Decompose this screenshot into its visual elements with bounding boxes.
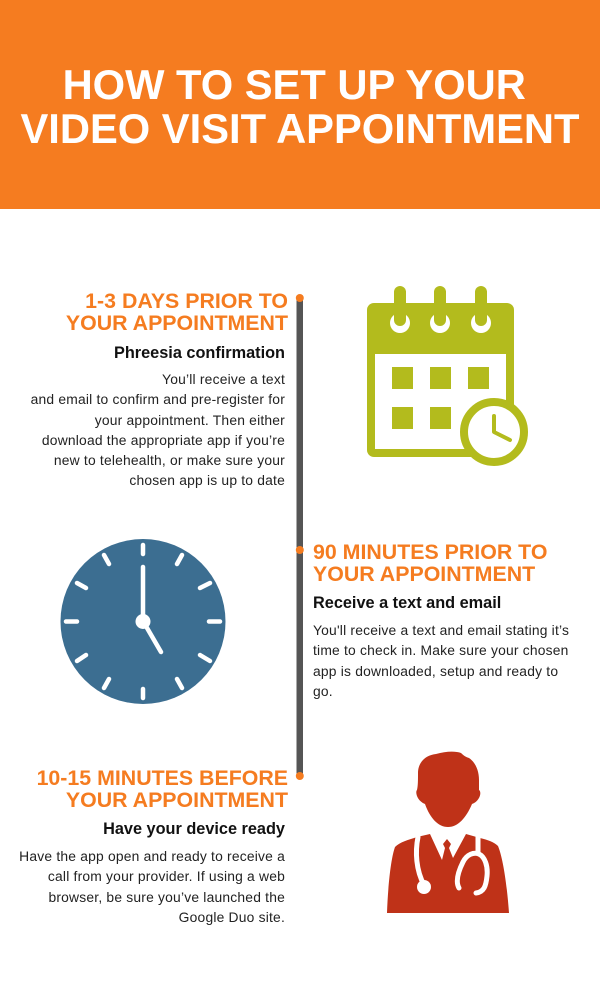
step 2 body: You'll receive a text and email stating it’s — [313, 622, 569, 638]
step 2 body: time to check in. Make sure your chosen — [313, 642, 569, 658]
step 3 heading — [37, 766, 288, 812]
step 3 subheading: Have your device ready — [103, 820, 285, 838]
step 2 body: go. — [313, 683, 333, 699]
step 2 body: app is downloaded, setup and ready to — [313, 663, 558, 679]
step 3 body: Have the app open and ready to receive a — [19, 848, 285, 864]
step 2 heading: YOUR APPOINTMENT — [313, 562, 535, 586]
step 1 heading: YOUR APPOINTMENT — [66, 311, 288, 335]
step 3 body: call from your provider. If using a web — [48, 868, 285, 884]
step 1 body — [31, 371, 285, 488]
step 1 body: and email to confirm and pre-register for — [31, 391, 285, 407]
header banner — [0, 0, 600, 209]
step 1 heading — [66, 289, 288, 335]
step 3 body — [19, 848, 285, 925]
step 1 body: download the appropriate app if you’re — [42, 432, 285, 448]
step 1 body: new to telehealth, or make sure your — [54, 452, 285, 468]
icon: clock — [60, 539, 226, 704]
icon: calendar — [367, 286, 528, 466]
icon: doctor — [387, 752, 509, 913]
step 1 body: chosen app is up to date — [129, 472, 285, 488]
step 3 heading: YOUR APPOINTMENT — [66, 788, 288, 812]
timeline — [296, 294, 304, 780]
step 1 subheading: Phreesia confirmation — [114, 344, 285, 362]
step 3 body: Google Duo site. — [179, 909, 285, 925]
step 1 body: You’ll receive a text — [162, 371, 285, 387]
step 1 body: your appointment. Then either — [95, 412, 285, 428]
step 2 heading: 90 MINUTES PRIOR TO — [313, 540, 547, 564]
title: VIDEO VISIT APPOINTMENT — [20, 105, 579, 152]
title: HOW TO SET UP YOUR — [63, 61, 526, 108]
step 2 heading — [313, 540, 547, 586]
step 2 body — [313, 622, 569, 699]
step 3 body: browser, be sure you’ve launched the — [48, 889, 285, 905]
title — [20, 61, 580, 152]
step 1 heading: 1-3 DAYS PRIOR TO — [85, 289, 288, 313]
step 3 heading: 10-15 MINUTES BEFORE — [37, 766, 288, 790]
step 2 subheading: Receive a text and email — [313, 594, 501, 612]
